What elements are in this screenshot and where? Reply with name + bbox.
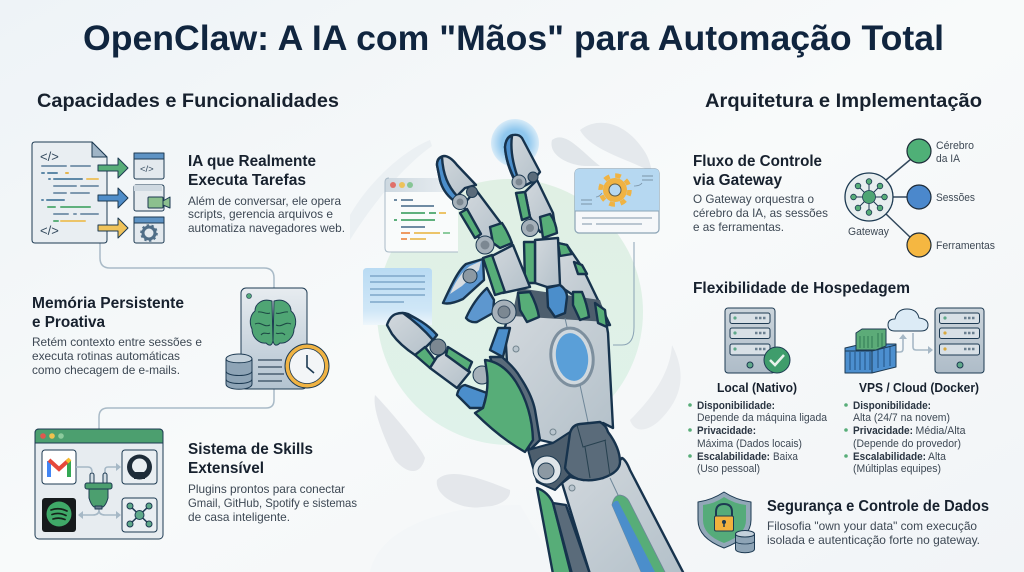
floating blue note	[363, 268, 432, 325]
column: vps / cloud (docker): (Múltiplas equipes)	[853, 463, 941, 475]
diagram: gateway hub: Cérebro	[936, 140, 974, 152]
forearm	[537, 458, 684, 572]
floating gear card	[575, 169, 659, 233]
text block: segurança	[767, 498, 989, 547]
diagram: gateway hub: da IA	[936, 153, 961, 165]
connector: execution to memory	[100, 243, 274, 288]
column: local (nativo): (Uso pessoal)	[697, 463, 760, 475]
wrist	[528, 422, 620, 490]
icon: skills window with plugin	[35, 429, 163, 539]
icon: GitHub tile	[122, 450, 157, 484]
icon: Spotify tile	[42, 498, 76, 532]
text block: sistema de skills: de casa inteligente.	[188, 510, 290, 524]
column: vps / cloud (docker): (Depende do provedor)	[853, 438, 961, 450]
column: local (nativo): Privacidade:	[697, 425, 756, 437]
text block: memória persistente: Retém contexto entre sessões e	[32, 335, 202, 349]
heading: flexibilidade de hospedagem: Flexibilidade de Hospedagem	[693, 280, 910, 297]
index finger	[437, 156, 530, 295]
text block: segurança: isolada e autenticação forte no gateway.	[767, 533, 980, 547]
connector: gear card to hand	[613, 242, 634, 345]
blue glow at fingertip	[491, 119, 539, 167]
column: vps / cloud (docker)	[844, 380, 979, 475]
column: vps / cloud (docker): Escalabilidade:	[853, 451, 926, 463]
title: OpenClaw: A IA com "Mãos" para Automação Total	[83, 19, 944, 58]
text block: IA que realmente executa tarefas: Executa Tarefas	[188, 172, 306, 189]
text block: fluxo de controle: e as ferramentas.	[693, 220, 784, 234]
text block: IA que realmente executa tarefas: scripts, gerencia arquivos e	[188, 207, 333, 221]
diagram: gateway hub: Sessões	[936, 192, 975, 204]
column: local (nativo)	[688, 380, 828, 475]
diagram: gateway hub: Ferramentas	[936, 240, 995, 252]
palm	[505, 312, 613, 443]
column: local (nativo): Depende da máquina ligada	[697, 412, 828, 424]
text block: segurança: Filosofia "own your data" com execução	[767, 519, 977, 533]
text block: memória persistente: como checagem de e-mails.	[32, 363, 180, 377]
icon: cloud and containers	[845, 309, 933, 373]
icon: brain card with database and clock	[226, 288, 329, 389]
text block: fluxo de controle	[693, 153, 828, 234]
column: vps / cloud (docker): Alta (24/7 na novem)	[853, 412, 950, 424]
text block: IA que realmente executa tarefas	[188, 153, 345, 235]
column: local (nativo): Baixa	[773, 451, 799, 463]
column: vps / cloud (docker): VPS / Cloud (Docker)	[859, 380, 979, 395]
icon: code document with task arrows: </>	[40, 149, 59, 164]
robotic hand	[387, 135, 684, 572]
text block: IA que realmente executa tarefas: Além de conversar, ele opera	[188, 194, 341, 208]
text block: memória persistente	[32, 295, 202, 377]
text block: sistema de skills: Sistema de Skills	[188, 441, 313, 458]
icon: task windows	[134, 153, 170, 243]
middle finger	[505, 135, 560, 287]
icon: code document with task arrows: </>	[40, 223, 59, 238]
icon: code document with task arrows	[32, 142, 128, 243]
column: vps / cloud (docker): Disponibilidade:	[853, 400, 931, 412]
text block: memória persistente: e Proativa	[32, 314, 105, 331]
heading: arquitetura: Arquitetura e Implementação	[705, 91, 982, 112]
back fingers	[443, 243, 610, 325]
text block: memória persistente: executa rotinas automáticas	[32, 349, 180, 363]
column: local (nativo): Local (Nativo)	[717, 380, 797, 395]
gateway node	[845, 173, 893, 221]
text block: IA que realmente executa tarefas: automatiza navegadores web.	[188, 221, 345, 235]
icon: network tile	[122, 498, 157, 532]
icon: local server with check	[725, 308, 790, 373]
column: vps / cloud (docker): Alta	[928, 451, 947, 463]
text block: fluxo de controle: cérebro da IA, as sessões	[693, 206, 828, 220]
text block: fluxo de controle: O Gateway orquestra o	[693, 192, 814, 206]
icon: task windows: </>	[140, 164, 154, 175]
text block: IA que realmente executa tarefas: IA que Realmente	[188, 153, 316, 170]
icon: plug	[85, 473, 112, 509]
diagram: gateway hub: Gateway	[848, 226, 889, 238]
green circle behind hand	[377, 179, 643, 445]
column: vps / cloud (docker): Privacidade:	[853, 425, 913, 437]
column: local (nativo): Máxima (Dados locais)	[697, 438, 802, 450]
icon: Gmail tile	[42, 450, 76, 484]
palm core	[513, 318, 597, 435]
heading: capacidades: Capacidades e Funcionalidades	[37, 91, 339, 112]
connector: memory to skills	[99, 389, 274, 429]
text block: fluxo de controle: Fluxo de Controle	[693, 153, 822, 170]
dark joints behind knuckles	[512, 288, 607, 322]
text block: segurança: Segurança e Controle de Dados	[767, 498, 989, 515]
text block: sistema de skills: Plugins prontos para conectar	[188, 482, 345, 496]
diagram: gateway hub	[845, 139, 995, 257]
thumb	[387, 313, 540, 452]
icon: cloud server	[935, 308, 984, 373]
text block: fluxo de controle: via Gateway	[693, 172, 782, 189]
column: local (nativo): Disponibilidade:	[697, 400, 775, 412]
knuckles	[490, 285, 607, 357]
floating code window	[385, 178, 465, 252]
text block: sistema de skills: Extensível	[188, 460, 264, 477]
text block: memória persistente: Memória Persistente	[32, 295, 184, 312]
column: local (nativo): Escalabilidade:	[697, 451, 770, 463]
column: vps / cloud (docker): Média/Alta	[916, 425, 966, 437]
icon: security shield with lock and database	[698, 492, 754, 553]
text block: sistema de skills	[188, 441, 357, 524]
text block: sistema de skills: Gmail, GitHub, Spotify e sistemas	[188, 496, 357, 510]
